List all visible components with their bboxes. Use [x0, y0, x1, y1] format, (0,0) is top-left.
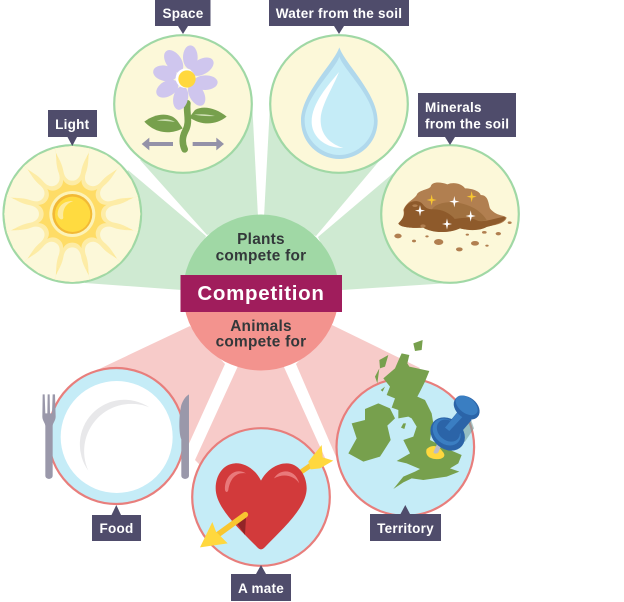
circle: a mate: [192, 428, 333, 566]
icon: heart with arrow: [200, 445, 333, 549]
title band: competition: Competition: [197, 282, 325, 305]
circle: food: [42, 368, 189, 504]
icon: plate and cutlery: [42, 381, 189, 493]
circle: water from the soil: [270, 35, 408, 173]
label: light: [48, 110, 97, 146]
title band: competition: [180, 275, 342, 312]
circle: light: [4, 145, 141, 283]
centre circle: [183, 215, 339, 370]
icon: soil pile: [394, 183, 512, 251]
icon: flower with arrows: [142, 45, 227, 150]
label: territory: [370, 505, 441, 541]
circle: territory: [336, 340, 484, 516]
label: water from the soil: Water from the soil: [276, 6, 402, 21]
circle: space: [114, 35, 252, 173]
heading: animals compete for: Animals: [230, 318, 292, 335]
green wedges: plants: [85, 100, 450, 290]
heading: plants compete for: Plants: [237, 231, 285, 248]
label: food: Food: [100, 521, 134, 536]
label: minerals from the soil: Minerals: [425, 100, 482, 115]
label: food: [92, 505, 141, 541]
label: a mate: [231, 565, 291, 601]
heading: animals compete for: compete for: [216, 334, 306, 350]
label: light: Light: [55, 117, 90, 132]
icon: UK map with pin: [348, 340, 484, 489]
label: water from the soil: [269, 0, 409, 34]
label: space: [155, 0, 210, 34]
icon: water drop: [301, 47, 378, 159]
pink wedges: animals: [97, 325, 420, 470]
label: space: Space: [162, 6, 204, 21]
label: minerals from the soil: [418, 93, 516, 145]
circle: minerals from the soil: [381, 145, 519, 283]
label: minerals from the soil: from the soil: [425, 116, 509, 132]
label: territory: Territory: [377, 521, 434, 536]
icon: sun: [4, 146, 140, 282]
heading: plants compete for: compete for: [216, 248, 306, 264]
label: a mate: A mate: [238, 581, 284, 596]
